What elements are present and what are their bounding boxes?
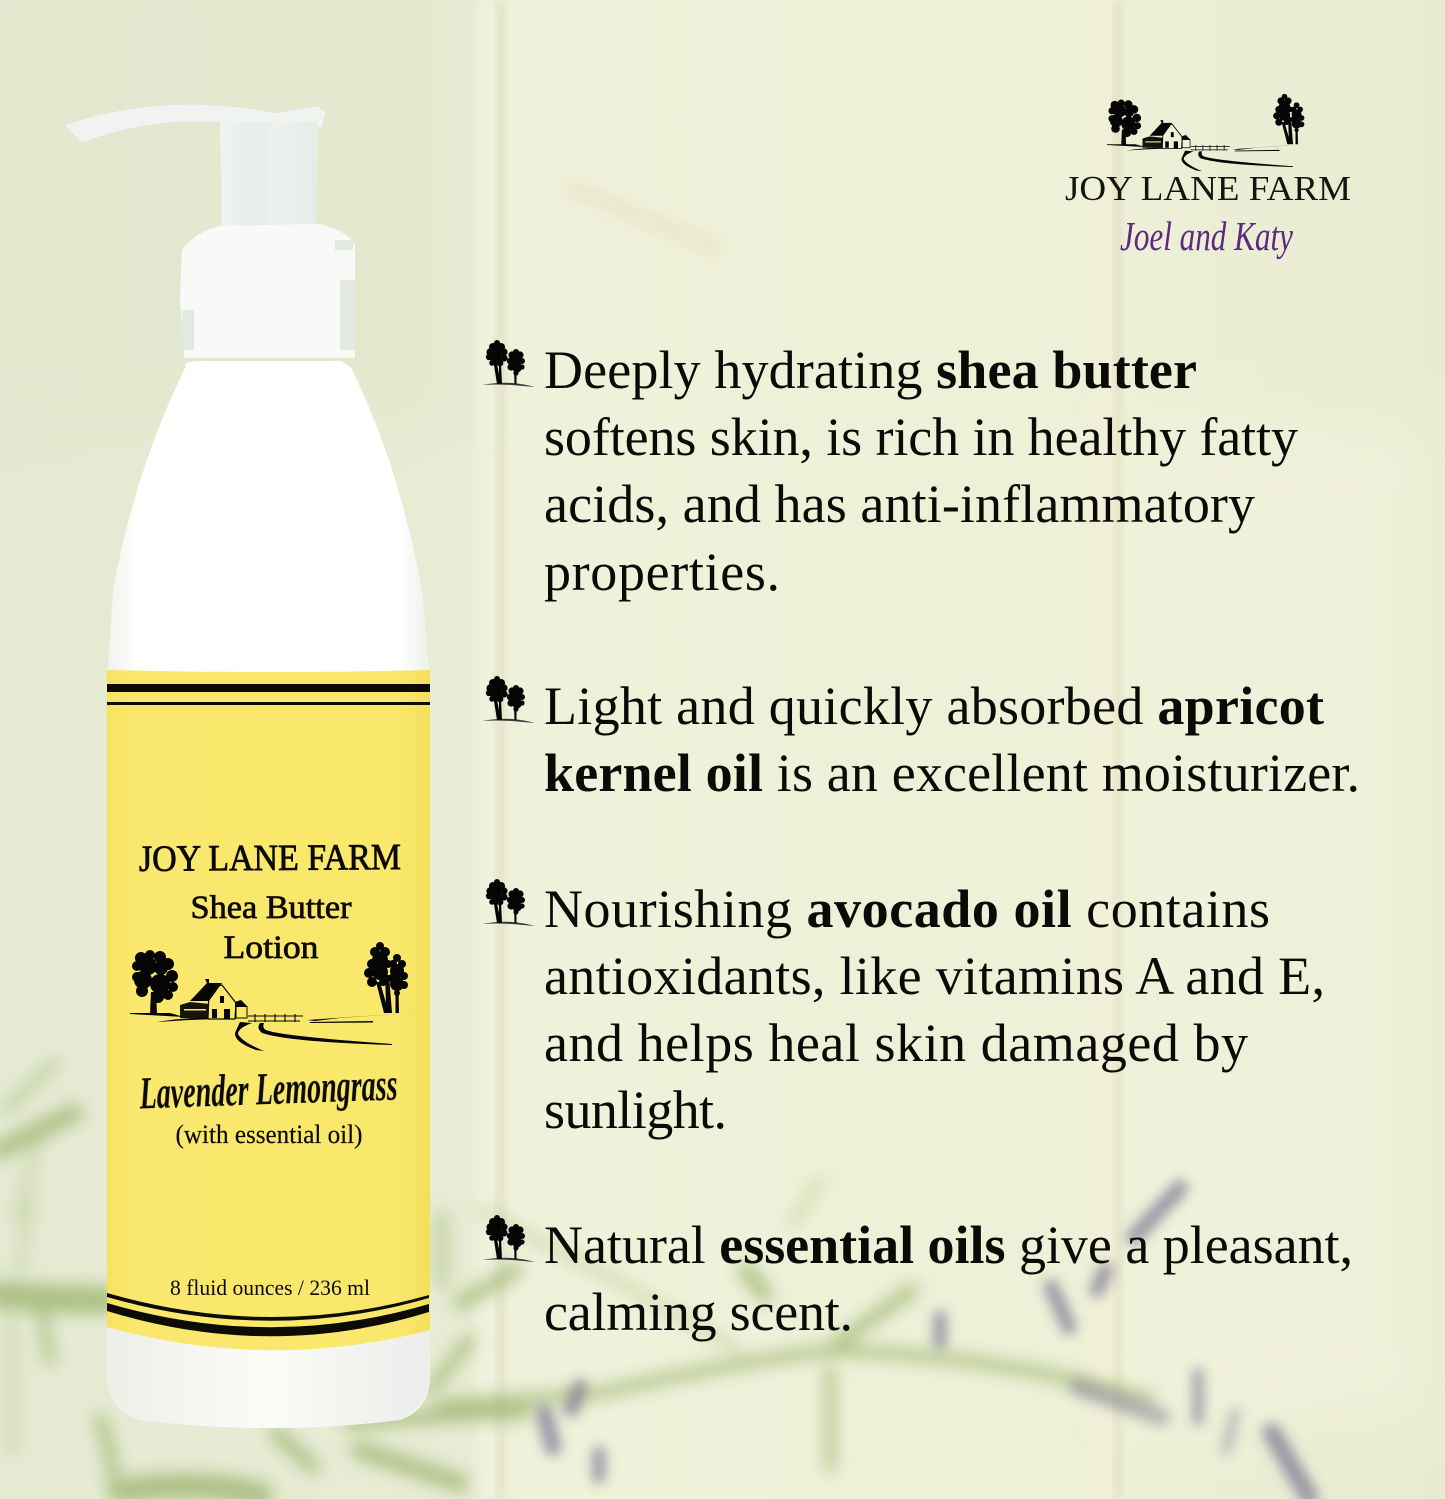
benefit: shea butter (482, 340, 1298, 602)
yellow label (107, 670, 430, 1350)
icon: trees (482, 1215, 535, 1262)
label essential oil note: (with essential oil) (176, 1120, 362, 1149)
apricot kernel oil text: Light and quickly absorbed apricot (544, 676, 1324, 736)
brand logo (1065, 94, 1351, 259)
pump stem (220, 122, 318, 232)
essential oils text: Natural essential oils give a pleasant, (544, 1215, 1353, 1275)
logo farm illustration (1107, 94, 1306, 171)
pump spout (64, 104, 326, 143)
avocado oil text: sunlight. (544, 1080, 727, 1140)
apricot kernel oil text: kernel oil is an excellent moisturizer. (544, 743, 1360, 803)
logo brand name: JOY LANE FARM (1065, 169, 1351, 208)
shea butter text: softens skin, is rich in healthy fatty (544, 407, 1298, 467)
avocado oil text (544, 879, 1325, 1140)
label product name (190, 890, 352, 966)
pump collar (180, 224, 355, 358)
shea butter text (544, 340, 1298, 602)
label product name: Lotion (224, 930, 318, 966)
bottle base (107, 1320, 430, 1428)
label farm illustration (130, 942, 410, 1051)
avocado oil text: Nourishing avocado oil contains (544, 879, 1270, 939)
shea butter text: acids, and has anti-inflammatory (544, 474, 1255, 534)
essential oils text: calming scent. (544, 1282, 853, 1342)
label stripes (107, 684, 430, 1336)
background: blurred lavender stems (0, 1063, 1309, 1499)
bottle body (107, 361, 430, 1428)
essential oils text (544, 1215, 1353, 1342)
label product name: Shea Butter (190, 890, 352, 926)
shea butter text: properties. (544, 542, 780, 602)
label brand name: JOY LANE FARM (139, 837, 401, 880)
icon: trees (482, 676, 535, 723)
avocado oil text: and helps heal skin damaged by (544, 1013, 1248, 1073)
icon: trees (482, 340, 535, 387)
shea butter text: Deeply hydrating shea butter (544, 340, 1197, 400)
label volume: 8 fluid ounces / 236 ml (170, 1275, 370, 1300)
icon: trees (482, 879, 535, 926)
benefit: apricot kernel oil (482, 676, 1360, 803)
benefit: avocado oil (482, 879, 1325, 1140)
label scent name: Lavender Lemongrass (138, 1059, 398, 1119)
benefit: essential oils (482, 1215, 1353, 1342)
logo signature: Joel and Katy (1120, 213, 1294, 259)
avocado oil text: antioxidants, like vitamins A and E, (544, 946, 1325, 1006)
product bottle (64, 104, 430, 1428)
apricot kernel oil text (544, 676, 1360, 803)
